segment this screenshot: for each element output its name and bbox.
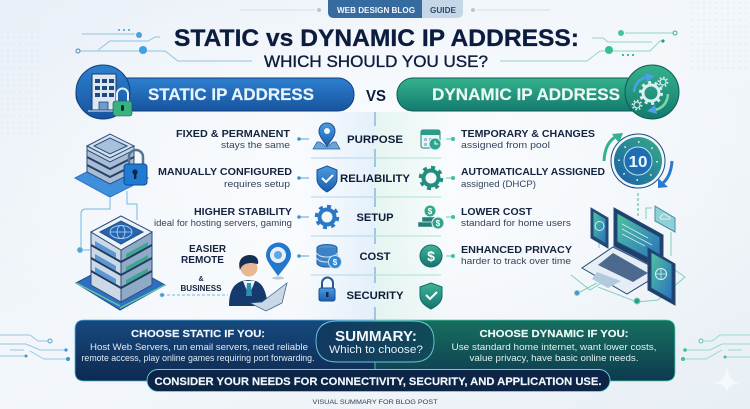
title: STATIC vs DYNAMIC IP ADDRESS: bbox=[174, 25, 579, 52]
top tabs: blog and guide: WEB DESIGN BLOG bbox=[337, 6, 415, 15]
centre category labels: PURPOSE bbox=[347, 134, 404, 146]
feature: easier remote and business: EASIER bbox=[189, 243, 226, 255]
panel: choose static: CHOOSE STATIC IF YOU: bbox=[131, 328, 265, 340]
banner: dynamic IP address bbox=[397, 65, 679, 119]
circuit lines: top left bbox=[76, 30, 252, 61]
title bbox=[174, 25, 579, 71]
centre category labels: RELIABILITY bbox=[340, 173, 411, 185]
feature: enhanced privacy: ENHANCED PRIVACY bbox=[461, 244, 572, 256]
left connector dots bbox=[297, 137, 309, 258]
icon: dollar coin: $ bbox=[427, 248, 435, 264]
feature: easier remote and business: REMOTE bbox=[181, 254, 224, 266]
feature: lower cost: LOWER COST bbox=[461, 206, 533, 218]
feature: fixed and permanent: FIXED & PERMANENT bbox=[176, 128, 291, 140]
panel: choose static: Host Web Servers, run email servers, need reliable bbox=[90, 342, 308, 352]
panel: choose static bbox=[75, 320, 375, 381]
summary badge: Which to choose? bbox=[329, 344, 423, 356]
illustration: countdown dial with arrows bbox=[604, 133, 672, 216]
consider your needs banner bbox=[147, 370, 610, 392]
feature: easier remote and business bbox=[180, 243, 226, 293]
panel: choose dynamic: CHOOSE DYNAMIC IF YOU: bbox=[480, 328, 628, 340]
icon: green coins bbox=[418, 206, 444, 229]
title: WHICH SHOULD YOU USE? bbox=[264, 53, 488, 71]
summary badge: SUMMARY: bbox=[335, 328, 417, 345]
illustration: laptop, phone and tablets bbox=[571, 206, 685, 305]
centre category labels: SECURITY bbox=[346, 290, 404, 302]
icon: gears with refresh arrows bbox=[632, 73, 668, 114]
data links between servers bbox=[78, 191, 228, 297]
feature: enhanced privacy: harder to track over time bbox=[461, 256, 571, 267]
icon: map pin bbox=[313, 123, 340, 149]
feature: easier remote and business: & bbox=[198, 276, 204, 283]
icon: calendar with clock bbox=[421, 130, 441, 150]
icon: green gear bbox=[420, 168, 442, 188]
centre spine and row dividers bbox=[311, 112, 441, 320]
panel: choose dynamic: value privacy, have basic online needs. bbox=[470, 353, 638, 363]
feature: enhanced privacy bbox=[461, 244, 572, 267]
illustration: small locked server bbox=[75, 134, 148, 197]
icon: blue gear bbox=[316, 206, 338, 228]
feature: lower cost: standard for home users bbox=[461, 218, 571, 229]
left column: static features bbox=[154, 128, 292, 293]
centre category labels: SETUP bbox=[356, 212, 394, 224]
circuit lines: bottom left bbox=[0, 335, 70, 361]
banner: dynamic IP address: DYNAMIC IP ADDRESS bbox=[432, 85, 620, 104]
feature: higher stability bbox=[154, 206, 292, 229]
feature: temporary and changes: TEMPORARY & CHANGES bbox=[461, 128, 595, 140]
feature: manually configured bbox=[158, 166, 292, 190]
consider your needs banner: CONSIDER YOUR NEEDS FOR CONNECTIVITY, SECURITY, AND APPLICATION USE. bbox=[154, 376, 602, 388]
illustration: business person with laptop and pin bbox=[229, 242, 291, 311]
feature: automatically assigned bbox=[461, 166, 605, 190]
panel: choose dynamic bbox=[375, 320, 675, 381]
icon: green coins: $ bbox=[436, 219, 441, 228]
icon: green coins: $ bbox=[428, 207, 433, 216]
feature: lower cost bbox=[461, 206, 571, 229]
panel: choose static: remote access, play online games requiring port forwarding. bbox=[82, 353, 314, 363]
feature: fixed and permanent: stays the same bbox=[221, 140, 290, 151]
illustration: main server stack bbox=[76, 216, 165, 310]
circuit lines: top right bbox=[500, 30, 677, 61]
right column: dynamic features bbox=[461, 128, 605, 267]
icon: coin stack bbox=[317, 244, 342, 268]
icon: blue padlock bbox=[319, 278, 335, 301]
top tabs: blog and guide: GUIDE bbox=[430, 6, 457, 15]
centre category labels: COST bbox=[360, 251, 391, 263]
feature: automatically assigned: AUTOMATICALLY ASSIGNED bbox=[461, 166, 605, 178]
centre category labels bbox=[340, 134, 411, 302]
feature: higher stability: HIGHER STABILITY bbox=[194, 206, 292, 218]
icon: coin stack: $ bbox=[333, 258, 338, 267]
feature: temporary and changes: assigned from pool bbox=[461, 140, 550, 151]
illustration: countdown dial with arrows: 10 bbox=[628, 154, 648, 171]
summary badge bbox=[316, 321, 434, 362]
feature: easier remote and business: BUSINESS bbox=[180, 284, 222, 293]
feature: fixed and permanent bbox=[176, 128, 291, 151]
icon: green shield bbox=[420, 283, 442, 309]
feature: temporary and changes bbox=[461, 128, 595, 151]
icon: blue shield bbox=[317, 166, 337, 192]
circuit lines: bottom right bbox=[681, 335, 750, 361]
footer caption: VISUAL SUMMARY FOR BLOG POST bbox=[312, 399, 438, 406]
panel: choose dynamic: Use standard home internet, want lower costs, bbox=[452, 342, 656, 352]
icon: dollar coin bbox=[420, 245, 442, 267]
watermark sparkle bbox=[713, 366, 741, 392]
banner: static IP address bbox=[76, 65, 354, 119]
icon: office building with padlock bbox=[88, 74, 132, 116]
feature: manually configured: MANUALLY CONFIGURED bbox=[158, 166, 292, 178]
top tabs: blog and guide bbox=[240, 0, 550, 18]
feature: higher stability: ideal for hosting servers, gaming bbox=[154, 218, 292, 229]
banner: static IP address: STATIC IP ADDRESS bbox=[148, 85, 314, 104]
feature: manually configured: requires setup bbox=[224, 179, 290, 190]
right connector dots bbox=[446, 137, 455, 258]
feature: automatically assigned: assigned (DHCP) bbox=[461, 179, 536, 190]
VS label: VS bbox=[366, 88, 386, 105]
